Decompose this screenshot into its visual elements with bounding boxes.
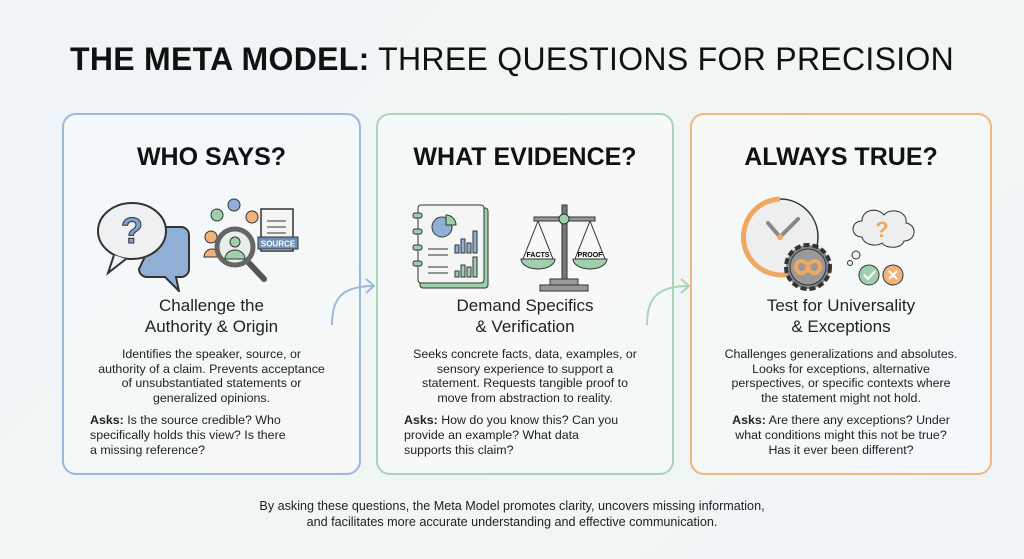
subheading: Challenge the <box>159 296 264 315</box>
heading: who says: WHO SAYS? <box>137 143 286 171</box>
icons: clock, gear, thought cloud: ? <box>875 217 889 242</box>
panel: who says <box>62 113 361 475</box>
description <box>725 347 957 457</box>
arrow 2 <box>646 278 690 325</box>
description: Seeks concrete facts, data, examples, or <box>413 347 637 361</box>
icons: speech bubbles and magnifier: ? <box>121 210 143 251</box>
subheading: & Verification <box>475 317 575 336</box>
description: specifically holds this view? Is there <box>90 428 286 442</box>
description: authority of a claim. Prevents acceptance <box>98 362 325 376</box>
heading: always true: ALWAYS TRUE? <box>744 143 938 171</box>
description: Challenges generalizations and absolutes. <box>725 347 957 361</box>
subheading: & Exceptions <box>791 317 891 336</box>
description: a missing reference? <box>90 443 205 457</box>
description: what conditions might this not be true? <box>735 428 947 442</box>
description: sensory experience to support a <box>437 362 613 376</box>
subheading <box>456 296 594 336</box>
description: the statement might not hold. <box>761 391 921 405</box>
description: Looks for exceptions, alternative <box>752 362 930 376</box>
icons: clock, gear, thought cloud <box>740 196 915 291</box>
description: statement. Requests tangible proof to <box>422 376 628 390</box>
subheading <box>145 296 278 336</box>
description: Asks: Are there any exceptions? Under <box>732 413 950 427</box>
footer text: By asking these questions, the Meta Model promotes clarity, uncovers missing information, <box>259 499 765 513</box>
subheading: Demand Specifics <box>456 296 594 315</box>
subheading <box>767 296 916 336</box>
panel: what evidence <box>376 113 674 475</box>
icons: report and scale <box>412 204 608 292</box>
heading: what evidence: WHAT EVIDENCE? <box>413 143 637 171</box>
description: Has it ever been different? <box>768 443 914 457</box>
icons: speech bubbles and magnifier: SOURCE <box>261 240 296 248</box>
subheading: Test for Universality <box>767 296 915 315</box>
description: move from abstraction to reality. <box>437 391 613 405</box>
description: supports this claim? <box>404 443 514 457</box>
description <box>404 347 637 457</box>
description: provide an example? What data <box>404 428 579 442</box>
title: THE META MODEL: THREE QUESTIONS FOR PRECISION <box>70 41 954 77</box>
subheading: Authority & Origin <box>145 317 278 336</box>
footer text: and facilitates more accurate understanding and effective communication. <box>307 515 717 529</box>
description: perspectives, or specific contexts where <box>732 376 950 390</box>
description: generalized opinions. <box>153 391 270 405</box>
description: Asks: How do you know this? Can you <box>404 413 618 427</box>
description: Identifies the speaker, source, or <box>122 347 301 361</box>
arrow 1 <box>331 278 376 325</box>
icons: speech bubbles and magnifier <box>97 198 298 292</box>
description: Asks: Is the source credible? Who <box>90 413 281 427</box>
description <box>90 347 325 457</box>
icons: report and scale: PROOF <box>578 252 603 259</box>
footer text <box>259 499 765 529</box>
description: of unsubstantiated statements or <box>122 376 301 390</box>
panel: always true <box>690 113 992 475</box>
icons: report and scale: FACTS <box>527 252 550 259</box>
